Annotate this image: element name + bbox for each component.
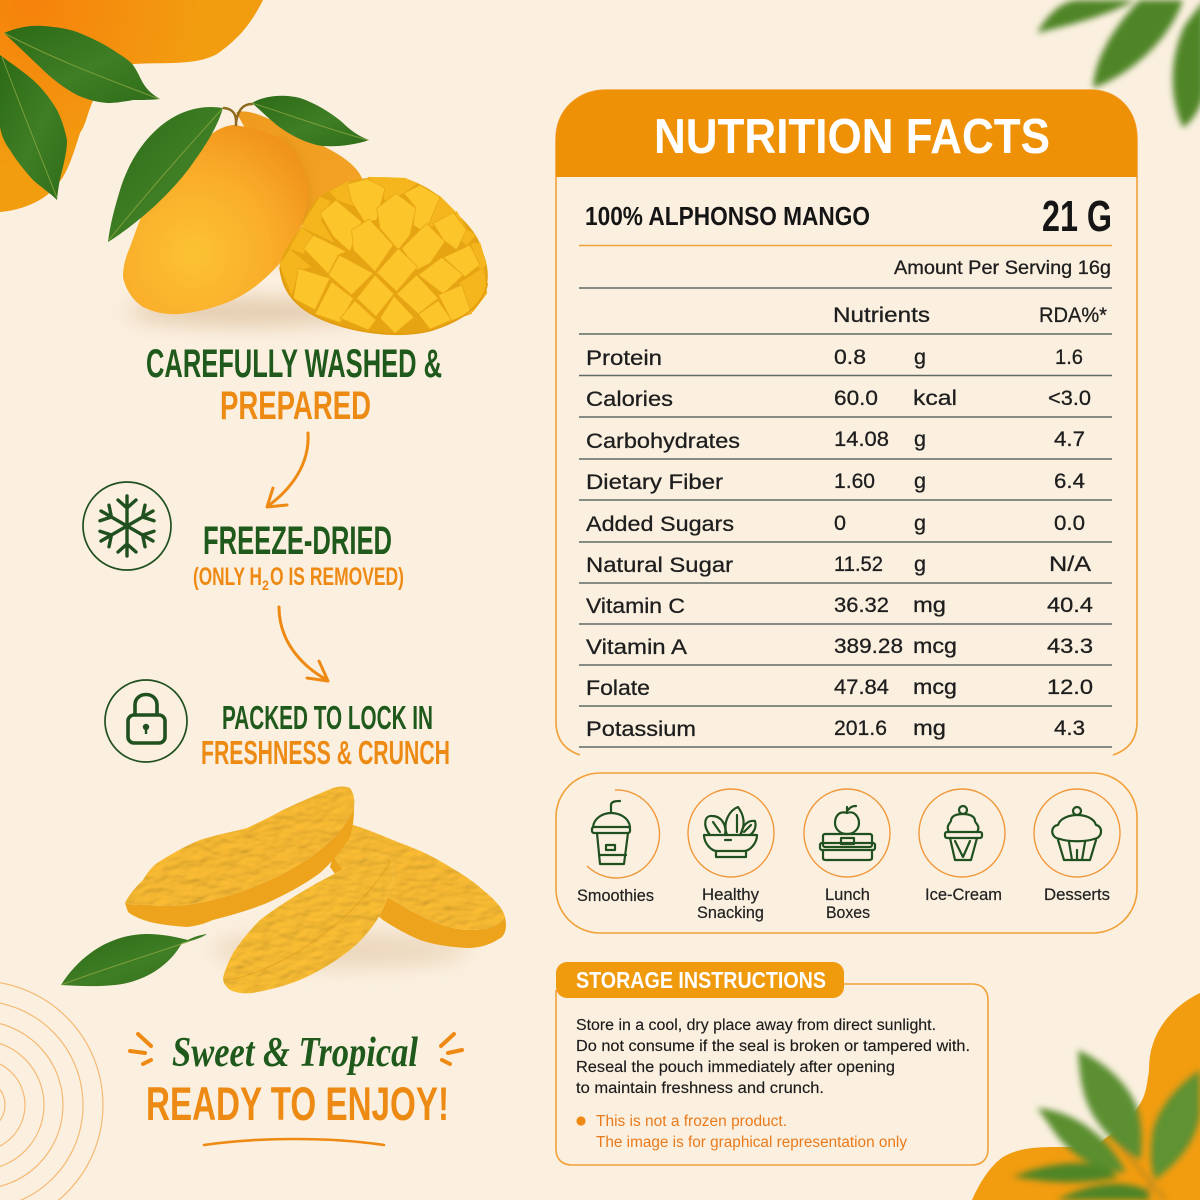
row: calories: Calories <box>586 387 673 411</box>
panel: storage instructions <box>556 962 988 1165</box>
row: vitamin c <box>586 593 1093 618</box>
storage note: This is not a frozen product. <box>596 1113 787 1130</box>
underline stroke <box>204 1139 384 1145</box>
storage text: to maintain freshness and crunch. <box>576 1080 824 1097</box>
row: added sugars: Added Sugars <box>586 512 734 536</box>
panel outline <box>556 90 1137 755</box>
table header: RDA%* <box>1039 303 1108 327</box>
illustration: dried mango pieces <box>125 786 506 993</box>
decorative blob: bottom right <box>972 993 1200 1200</box>
row: added sugars: 0 <box>834 511 846 535</box>
big mango shadow <box>260 135 310 270</box>
use: desserts: Desserts <box>1044 886 1110 904</box>
back mango <box>236 111 365 225</box>
row: protein: 1.6 <box>1055 345 1083 369</box>
arrow: prepared to freeze-dried <box>267 433 308 507</box>
heading: carefully washed and prepared <box>146 342 442 428</box>
storage title: STORAGE INSTRUCTIONS <box>576 967 826 993</box>
table header <box>833 303 1108 327</box>
panel: nutrition facts <box>556 90 1137 755</box>
use: smoothies: Smoothies <box>577 887 654 905</box>
row: carbohydrates: 14.08 <box>834 427 889 451</box>
row: vitamin c: 36.32 <box>834 593 889 617</box>
use: smoothies <box>577 790 659 905</box>
use: lunch boxes: Lunch <box>825 886 870 904</box>
row: vitamin a: 389.28 <box>834 634 903 658</box>
row: calories: 60.0 <box>834 386 878 410</box>
storage note <box>576 1113 907 1151</box>
heading: packed to lock in freshness <box>201 699 450 771</box>
row: folate: Folate <box>586 676 650 700</box>
heading: packed to lock in freshness: PACKED TO LOCK IN <box>222 699 433 736</box>
panel header <box>556 90 1137 177</box>
use: ice-cream <box>919 789 1005 904</box>
dried mango left <box>125 786 354 927</box>
use: lunch boxes <box>804 789 890 922</box>
row: calories: <3.0 <box>1048 386 1091 410</box>
row: vitamin a <box>586 634 1093 659</box>
panel: uses <box>556 773 1137 933</box>
dried mango front <box>223 853 394 993</box>
heading: carefully washed and prepared: PREPARED <box>220 384 371 428</box>
row: carbohydrates: g <box>914 427 926 451</box>
row: vitamin c: 40.4 <box>1047 593 1093 617</box>
heading: freeze-dried <box>193 519 404 593</box>
use: lunch boxes: Boxes <box>826 904 870 922</box>
sparkle accents <box>130 1034 462 1064</box>
decorative blurred leaves: bottom right <box>1013 1050 1200 1200</box>
row: added sugars: 0.0 <box>1054 511 1085 535</box>
table header: Nutrients <box>833 303 930 327</box>
row: potassium: 201.6 <box>834 716 887 740</box>
row: natural sugar <box>586 552 1092 577</box>
mango leaf right <box>252 96 369 146</box>
tagline: ready to enjoy: READY TO ENJOY! <box>146 1077 449 1130</box>
big mango <box>123 125 308 314</box>
tagline: sweet and tropical: Sweet & Tropical <box>172 1030 418 1076</box>
row: carbohydrates: 4.7 <box>1054 427 1085 451</box>
use: healthy snacking: Snacking <box>697 904 764 922</box>
panel title: NUTRITION FACTS <box>654 110 1050 164</box>
row: potassium: mg <box>913 716 946 740</box>
heading: freeze-dried: (ONLY H <box>193 563 262 591</box>
use: desserts <box>1034 789 1120 904</box>
storage tab <box>556 962 844 998</box>
dried mango back right <box>330 825 506 948</box>
use: healthy snacking: Healthy <box>702 886 760 904</box>
row: vitamin a: mcg <box>913 634 957 658</box>
storage outline <box>556 984 988 1165</box>
decorative blurred leaves: top right <box>1037 0 1200 128</box>
row: natural sugar: Natural Sugar <box>586 553 733 577</box>
row: folate: 12.0 <box>1047 675 1093 699</box>
uses outline <box>556 773 1137 933</box>
pack weight: 21 G <box>1042 192 1112 241</box>
storage text: Store in a cool, dry place away from direct sunlight. <box>576 1017 936 1034</box>
heading: carefully washed and prepared: CAREFULLY WASHED & <box>146 342 442 386</box>
row: protein: Protein <box>586 346 662 370</box>
decorative leaf near dried mango <box>61 934 207 986</box>
storage text: Do not consume if the seal is broken or tampered with. <box>576 1038 970 1055</box>
row: protein <box>586 345 1083 370</box>
row: potassium <box>586 716 1085 741</box>
arrow: freeze-dried to packed <box>279 607 328 681</box>
row: natural sugar: g <box>914 552 926 576</box>
heading: freeze-dried: FREEZE-DRIED <box>203 519 392 563</box>
mango stems <box>224 104 252 125</box>
decorative blob: top left <box>0 0 263 212</box>
icon: padlock <box>105 680 187 762</box>
cut mango hedgehog <box>280 177 488 334</box>
concentric rings <box>0 981 103 1200</box>
row: folate: mcg <box>913 675 957 699</box>
storage text <box>576 1017 970 1097</box>
heading: freeze-dried: O IS REMOVED) <box>270 563 404 591</box>
storage text: Reseal the pouch immediately after opening <box>576 1059 895 1076</box>
row: potassium: 4.3 <box>1054 716 1085 740</box>
row: natural sugar: N/A <box>1049 552 1092 576</box>
decorative leaves: top left <box>0 26 160 200</box>
row: vitamin a: Vitamin A <box>586 635 688 659</box>
use: healthy snacking <box>688 789 774 922</box>
row: potassium: Potassium <box>586 717 696 741</box>
row: calories <box>586 386 1091 411</box>
row: protein: 0.8 <box>834 345 866 369</box>
row: vitamin c: Vitamin C <box>586 594 685 618</box>
row: carbohydrates <box>586 427 1085 453</box>
storage note: The image is for graphical representation only <box>596 1134 907 1151</box>
product name: 100% ALPHONSO MANGO <box>585 201 870 231</box>
row: folate <box>586 675 1093 700</box>
row: carbohydrates: Carbohydrates <box>586 429 740 453</box>
use: ice-cream: Ice-Cream <box>925 886 1002 904</box>
row: folate: 47.84 <box>834 675 889 699</box>
illustration: fresh mangoes <box>108 96 488 334</box>
heading: freeze-dried: 2 <box>262 577 269 593</box>
row: vitamin c: mg <box>913 593 946 617</box>
mango leaf left <box>108 107 223 242</box>
row: dietary fiber: 6.4 <box>1054 469 1085 493</box>
row: natural sugar: 11.52 <box>834 552 883 576</box>
icon: snowflake <box>83 482 171 570</box>
row: dietary fiber: Dietary Fiber <box>586 470 723 494</box>
serving size: Amount Per Serving 16g <box>894 257 1111 279</box>
row: dietary fiber: g <box>914 469 926 493</box>
row: dietary fiber <box>586 469 1085 494</box>
row: added sugars <box>586 511 1085 536</box>
row: calories: kcal <box>913 386 957 410</box>
row: protein: g <box>914 345 926 369</box>
table lines <box>579 246 1112 747</box>
row: dietary fiber: 1.60 <box>834 469 875 493</box>
row: vitamin a: 43.3 <box>1047 634 1093 658</box>
heading: packed to lock in freshness: FRESHNESS & CRUNCH <box>201 734 450 771</box>
row: added sugars: g <box>914 511 926 535</box>
